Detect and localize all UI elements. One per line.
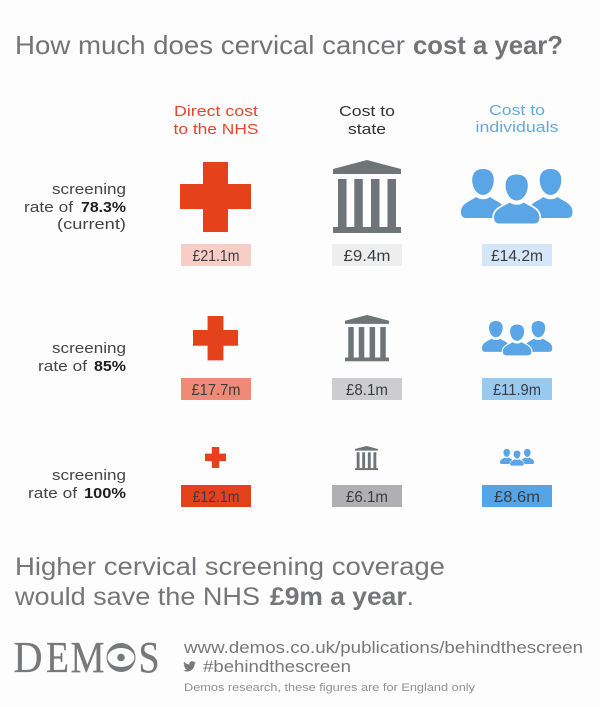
icon: large red cross: [180, 162, 251, 232]
value: £8.1m: £8.1m: [346, 382, 388, 399]
value: £21.1m: £21.1m: [192, 248, 240, 265]
row label: screening rate of 78.3%: (current): [57, 216, 126, 233]
logo: Demos: S: [138, 633, 160, 682]
value: £9.4m: [332, 244, 402, 266]
column heading: direct cost to the NHS: to the NHS: [174, 121, 258, 138]
value: £14.2m: £14.2m: [491, 248, 543, 265]
icon: large government building: [333, 160, 401, 233]
icon: medium group of people: [482, 321, 552, 355]
value: £9.4m: £9.4m: [344, 248, 390, 265]
value: £12.1m: £12.1m: [192, 489, 240, 506]
icon: medium government building: [345, 315, 389, 361]
icon: large group of people: [461, 169, 572, 224]
conclusion text: [14, 553, 445, 611]
logo: Demos: E: [46, 633, 69, 682]
row label: screening rate of 78.3%: screening: [52, 181, 126, 198]
icon: twitter bird: [183, 661, 196, 672]
row label: screening rate of 100%: [28, 467, 126, 502]
logo: Demos: M: [70, 633, 104, 682]
row label: screening rate of 78.3%: [24, 181, 126, 233]
title: How much does cervical cancer: [15, 30, 405, 60]
value: £12.1m: [181, 485, 251, 507]
value: £17.7m: £17.7m: [192, 382, 240, 399]
icon: small government building: [355, 446, 378, 470]
value: £8.6m: £8.6m: [494, 489, 540, 506]
value: £6.1m: £6.1m: [346, 489, 388, 506]
value: £6.1m: [332, 485, 402, 507]
row label: screening rate of 100%: screening: [52, 467, 126, 484]
value: £14.2m: [482, 244, 552, 266]
title: cost a year?: [413, 30, 563, 60]
column heading: cost to state: Cost to: [339, 103, 395, 120]
icon: small group of people: [500, 449, 534, 466]
column heading: cost to individuals: [476, 102, 558, 136]
conclusion text: Higher cervical screening coverage: [15, 553, 445, 581]
website address: www.demos.co.uk/publications/behindthescreen: [183, 638, 583, 657]
row label: screening rate of 78.3%: 78.3%: [81, 199, 126, 216]
row label: screening rate of 85%: 85%: [94, 358, 126, 375]
conclusion text: would save the NHS: [14, 583, 260, 611]
hashtag: #behindthescreen: [203, 657, 351, 676]
icon: medium red cross: [193, 316, 238, 360]
column heading: cost to state: [339, 103, 395, 138]
logo: Demos: [14, 633, 160, 682]
row label: screening rate of 100%: 100%: [84, 485, 126, 502]
column heading: cost to state: state: [348, 121, 386, 138]
value: £11.9m: £11.9m: [493, 382, 541, 399]
column heading: cost to individuals: Cost to: [489, 102, 545, 119]
conclusion text: £9m a year .: [270, 583, 414, 611]
row label: screening rate of 85%: [38, 340, 126, 375]
value: £8.1m: [332, 378, 402, 400]
row label: screening rate of 100%: rate of: [28, 485, 78, 502]
column heading: cost to individuals: individuals: [476, 119, 558, 136]
value: £21.1m: [181, 244, 251, 266]
value: £17.7m: [181, 378, 251, 400]
logo: Demos: D: [14, 633, 42, 682]
title: [15, 30, 563, 60]
row label: screening rate of 85%: screening: [52, 340, 126, 357]
row label: screening rate of 78.3%: rate of: [24, 199, 74, 216]
value: £11.9m: [482, 378, 552, 400]
source note: Demos research, these figures are for England only: [184, 682, 476, 694]
row label: screening rate of 85%: rate of: [38, 358, 88, 375]
value: £8.6m: [482, 485, 552, 507]
column heading: direct cost to the NHS: [174, 103, 259, 138]
column heading: direct cost to the NHS: Direct cost: [174, 103, 259, 120]
icon: small red cross: [205, 447, 226, 468]
